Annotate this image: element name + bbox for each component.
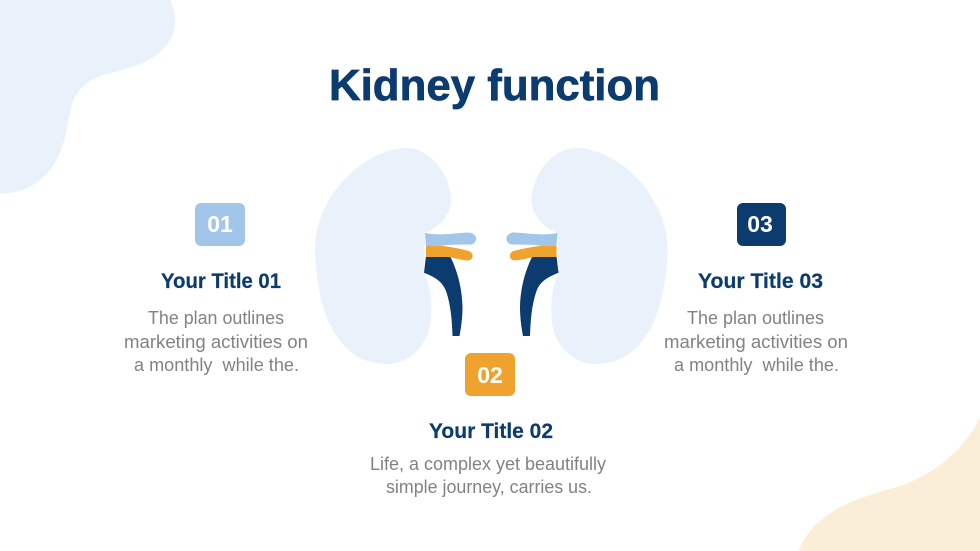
blob: top-left background <box>0 0 175 193</box>
item 02 <box>370 353 606 497</box>
left vein: orange <box>426 246 473 260</box>
description 01: a monthly while the. <box>134 355 299 375</box>
description 03: marketing activities on <box>664 332 848 352</box>
heading 03: Your Title 03 <box>698 269 823 293</box>
title: Kidney function <box>329 61 660 110</box>
heading 01: Your Title 01 <box>161 269 281 293</box>
kidney illustration <box>315 148 668 364</box>
right ureter: light blue <box>506 232 558 246</box>
description 03: a monthly while the. <box>674 355 839 375</box>
number badge 03 <box>737 203 786 246</box>
heading 02: Your Title 02 <box>429 419 553 443</box>
number badge 02 <box>465 353 515 396</box>
number badge 01 <box>195 203 245 246</box>
item 03 <box>664 203 848 375</box>
number badge 02: 02 <box>477 362 503 388</box>
right kidney shape <box>532 148 668 364</box>
description 02: Life, a complex yet beautifully <box>370 454 606 474</box>
left kidney shape <box>315 148 451 364</box>
description 01: The plan outlines <box>148 308 284 328</box>
description 01: marketing activities on <box>124 332 308 352</box>
description 01 <box>124 308 308 375</box>
description 02 <box>370 454 606 497</box>
description 02: simple journey, carries us. <box>386 477 592 497</box>
item 01 <box>124 203 308 375</box>
description 03: The plan outlines <box>687 308 824 328</box>
right vessel: navy <box>520 256 558 336</box>
blob: bottom-right background <box>799 418 980 551</box>
left ureter: light blue <box>425 232 476 246</box>
number badge 01: 01 <box>207 211 233 237</box>
description 03 <box>664 308 848 375</box>
right vein: orange <box>510 246 556 260</box>
number badge 03: 03 <box>747 211 773 237</box>
left vessel: navy <box>424 256 462 336</box>
